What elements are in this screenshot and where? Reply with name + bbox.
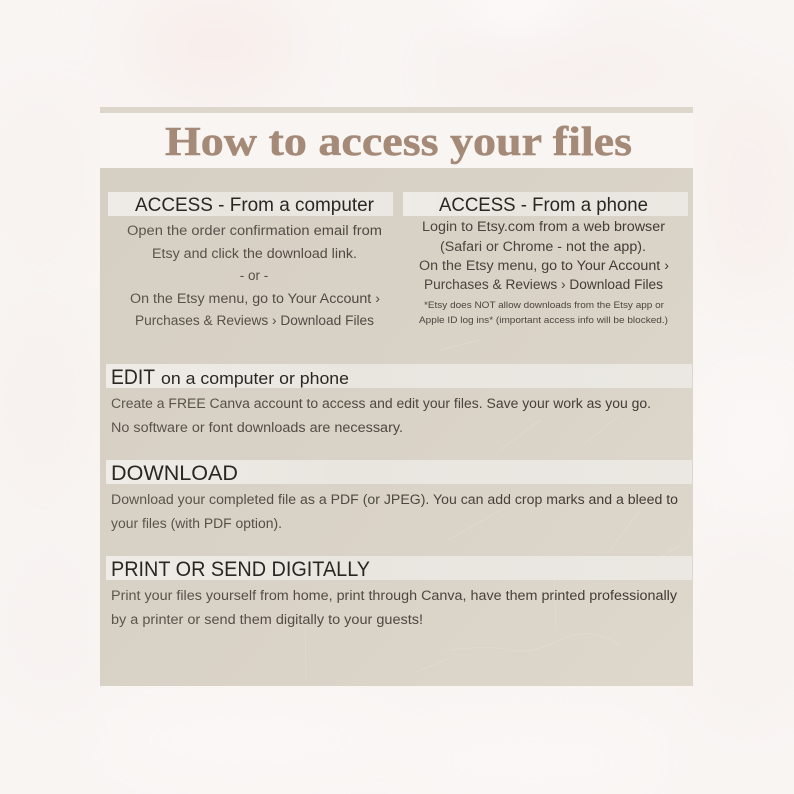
phone warning note: *Etsy does NOT allow downloads from the Etsy app or <box>424 300 664 311</box>
title banner <box>100 113 693 168</box>
top strip <box>100 107 693 113</box>
section: download <box>106 460 692 531</box>
print body text: by a printer or send them digitally to your guests! <box>111 612 423 627</box>
print body text: Print your files yourself from home, print through Canva, have them printed professionally <box>111 588 677 603</box>
download body text: your files (with PDF option). <box>111 516 282 531</box>
computer instructions: Etsy and click the download link. <box>152 246 357 261</box>
phone instructions: (Safari or Chrome - not the app). <box>440 239 646 254</box>
phone instructions <box>419 219 669 292</box>
print body text <box>111 588 677 627</box>
edit body text: Create a FREE Canva account to access and edit your files. Save your work as you go. <box>111 396 651 411</box>
download body text: Download your completed file as a PDF (or JPEG). You can add crop marks and a bleed to <box>111 492 678 507</box>
panel: access from a phone <box>403 192 688 326</box>
heading: edit: EDIT <box>111 366 155 389</box>
panel: access from a computer <box>108 192 393 328</box>
heading: access from a phone: ACCESS - From a phone <box>439 194 648 216</box>
computer instructions: - or - <box>240 268 268 283</box>
section: print or send digitally <box>106 556 692 627</box>
computer instructions: Purchases & Reviews › Download Files <box>135 313 374 328</box>
heading: print or send digitally: PRINT OR SEND DIGITALLY <box>111 558 370 581</box>
phone instructions: On the Etsy menu, go to Your Account › <box>419 258 669 273</box>
download body text <box>111 492 678 531</box>
phone warning note: Apple ID log ins* (important access info will be blocked.) <box>419 315 668 326</box>
phone instructions: Purchases & Reviews › Download Files <box>424 277 663 292</box>
phone instructions: Login to Etsy.com from a web browser <box>422 219 666 234</box>
heading: access from a computer: ACCESS - From a computer <box>135 194 374 216</box>
heading: download: DOWNLOAD <box>111 462 238 485</box>
section: edit <box>106 364 692 435</box>
subheading: on a computer or phone: on a computer or phone <box>161 369 349 388</box>
computer instructions <box>127 223 382 328</box>
edit body text: No software or font downloads are necessary. <box>111 420 403 435</box>
computer instructions: On the Etsy menu, go to Your Account › <box>130 291 380 306</box>
panel: beige card <box>100 107 693 686</box>
computer instructions: Open the order confirmation email from <box>127 223 382 238</box>
title: How to access your files <box>165 118 632 164</box>
phone warning note <box>419 300 668 326</box>
edit body text <box>111 396 651 435</box>
